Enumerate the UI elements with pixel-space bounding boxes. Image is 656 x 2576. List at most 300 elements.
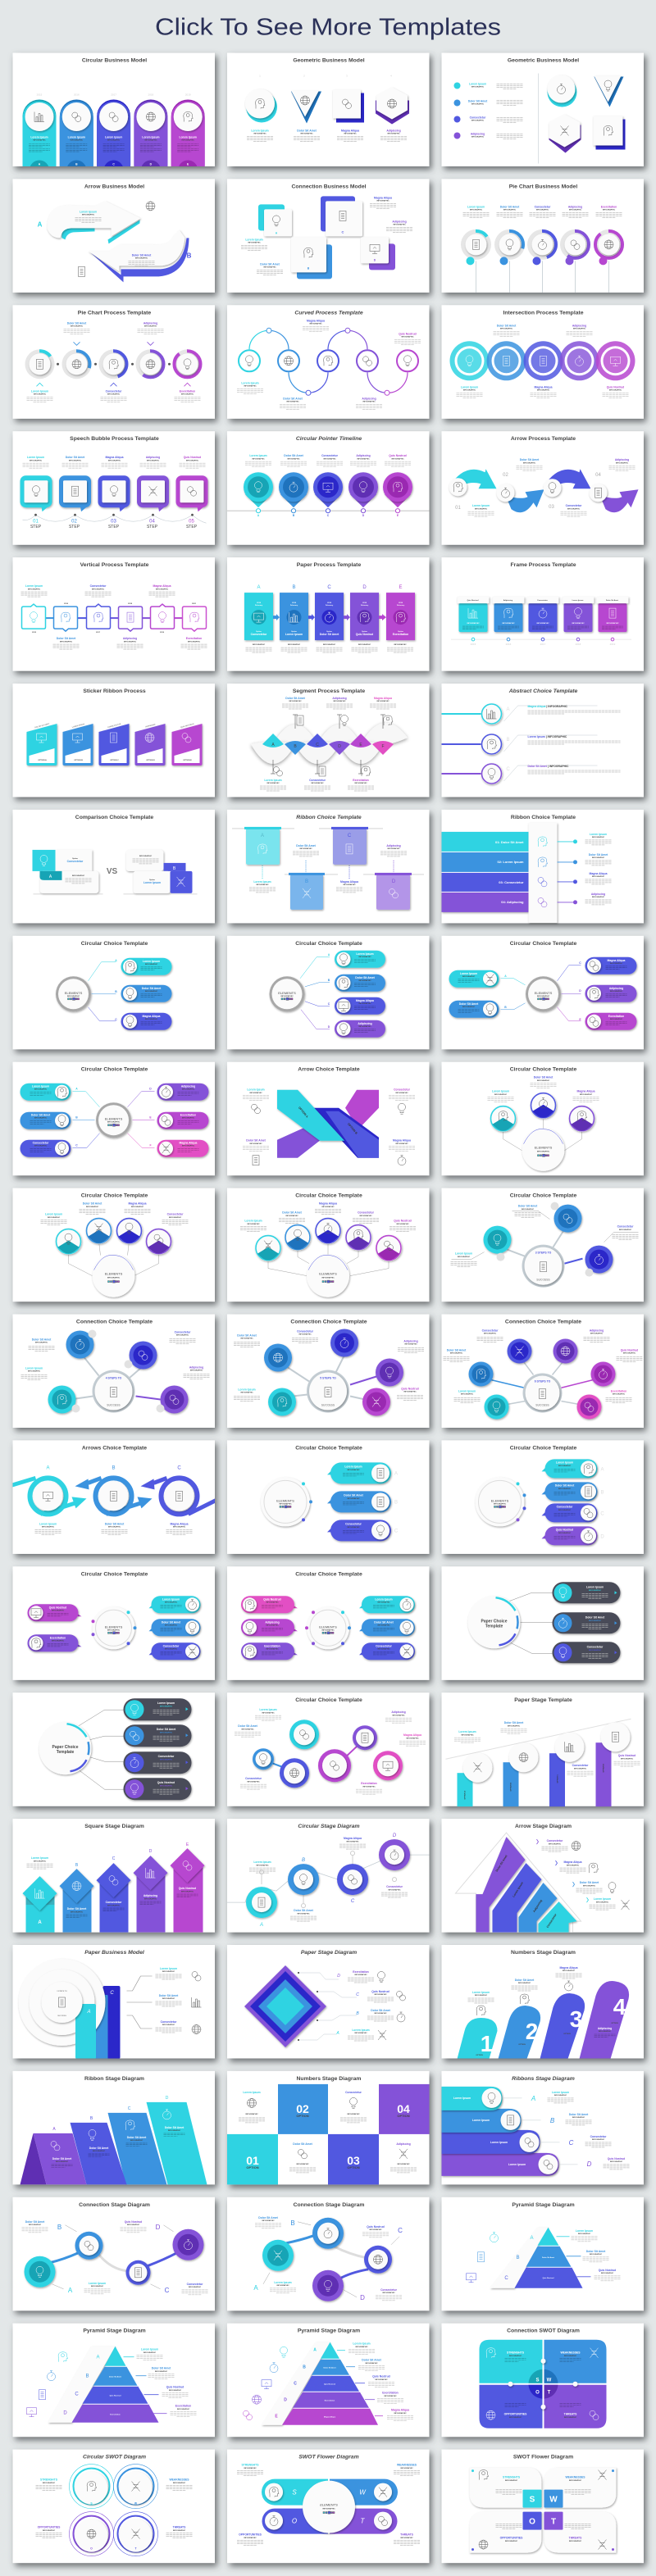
text labels: Dolor Sit Amet	[500, 205, 520, 208]
option pills: INFOGRAPHIC	[182, 1145, 195, 1147]
diagram: paper hub: Paper Choice	[481, 1619, 508, 1624]
diagram: stacked ribbons: Lorem Ipsum	[472, 2119, 490, 2122]
text labels: Consectetur	[297, 1329, 314, 1333]
diagram: five pills: D	[150, 162, 153, 166]
text labels: INFOGRAPHIC	[297, 1912, 310, 1915]
diagram: pointers on timeline: B	[293, 514, 295, 517]
diagram: concentric paper: SUCCESS	[57, 2015, 66, 2017]
diagram: linked stages	[227, 1833, 430, 1928]
heading: Circular Choice Template	[295, 1445, 362, 1451]
diagram: ribbon arrows: 04	[595, 473, 601, 478]
heading: Circular Business Model	[82, 57, 147, 64]
panel: Circular Choice Template M	[227, 1692, 430, 1806]
option bubbles: C	[600, 1511, 604, 1516]
text labels: Dolor Sit Amet	[297, 129, 317, 133]
text labels: INFOGRAPHIC	[60, 640, 73, 643]
text labels: INFOGRAPHIC	[461, 1393, 474, 1396]
option bubbles: INFOGRAPHIC	[347, 1497, 360, 1500]
text labels: INFOGRAPHIC	[35, 1342, 48, 1344]
text labels: Exercitation	[611, 1390, 626, 1393]
text labels: Lorem Ipsum	[576, 2229, 593, 2233]
option pills: INFOGRAPHIC	[610, 962, 623, 965]
diagram: two arrows: B	[187, 252, 192, 259]
text labels: Adipiscing	[391, 1711, 406, 1714]
text labels: INFOGRAPHIC	[181, 1890, 194, 1892]
diagram: stacked ribbons: D	[587, 2160, 592, 2168]
option bubbles: Consectetur	[345, 1522, 362, 1525]
diagram: bookmarks: C	[348, 834, 352, 838]
option bubbles: B	[394, 1500, 398, 1505]
diagram: hanging frames: INFOGRAPHIC	[572, 622, 585, 625]
text labels: INFOGRAPHIC	[173, 1526, 186, 1529]
text labels: INFOGRAPHIC	[144, 2351, 157, 2354]
diagram: pyramid: A	[530, 2236, 534, 2241]
diagram: paper bars: Consectetur	[251, 633, 267, 636]
text labels: INFOGRAPHIC	[563, 1969, 576, 1972]
diagram: VS comparison: INFOGRAPHIC	[72, 875, 85, 877]
panel: Pyramid Stage Diagram A	[441, 2197, 644, 2310]
text labels: Dolor Sit Amet	[284, 454, 304, 457]
text labels: Lorem Ipsum	[241, 381, 259, 384]
text labels: Adipiscing	[189, 1365, 203, 1369]
option pills: INFOGRAPHIC	[182, 1088, 195, 1091]
text labels: INFOGRAPHIC	[181, 393, 194, 395]
option bubbles: Dolor Sit Amet	[344, 1493, 364, 1497]
text labels: Consectetur	[572, 1764, 589, 1767]
text labels: INFOGRAPHIC	[359, 1215, 372, 1217]
text labels: WEAKNESSES	[397, 2464, 417, 2467]
diagram: five pills	[23, 93, 205, 166]
heading: Circular Choice Template	[81, 941, 148, 947]
text labels	[585, 833, 612, 905]
option pills: Lorem Ipsum	[460, 972, 477, 975]
text labels: Adipiscing	[362, 397, 376, 400]
option pills: INFOGRAPHIC	[145, 963, 158, 965]
text labels: Adipiscing	[332, 697, 347, 700]
text labels	[504, 2351, 581, 2419]
diagram: pointers on timeline: A	[257, 514, 260, 517]
text labels: Dolor Sit Amet	[586, 2250, 606, 2253]
text labels: INFOGRAPHIC	[135, 257, 148, 260]
connector lines	[300, 953, 330, 1029]
connector lines: A	[328, 953, 330, 956]
diagram: checkerboard of numbers: OPTION	[296, 2114, 309, 2118]
text labels: INFOGRAPHIC	[578, 2233, 591, 2235]
text labels: INFOGRAPHIC	[43, 2482, 56, 2484]
dark option pills: INFOGRAPHIC	[160, 1785, 173, 1788]
text labels: INFOGRAPHIC	[247, 1223, 260, 1225]
text labels: INFOGRAPHIC	[592, 875, 605, 878]
option pills: Exercitation	[608, 1015, 624, 1018]
diagram: checkerboard of numbers	[227, 2084, 430, 2184]
heading: Arrow Business Model	[84, 184, 144, 189]
text labels: INFOGRAPHIC	[286, 400, 299, 402]
option pills: Magna Aliqua	[608, 959, 626, 962]
text labels: Magna Aliqua	[391, 2409, 409, 2412]
text labels: Adipiscing	[396, 2142, 411, 2146]
text labels: Magna Aliqua	[374, 697, 392, 700]
option pills: Lorem Ipsum	[32, 1085, 49, 1088]
text labels: INFOGRAPHIC	[395, 1092, 408, 1094]
text labels: INFOGRAPHIC	[28, 588, 41, 590]
dark option pills: INFOGRAPHIC	[589, 1620, 602, 1622]
diagram: stepped paper bars	[446, 1719, 631, 1806]
text labels: Magna Aliqua	[307, 319, 325, 322]
option bubbles: C	[394, 1529, 399, 1533]
diagram: ring hub: INFOGRAPHIC	[321, 1629, 335, 1631]
text labels: THREATS	[400, 2533, 414, 2537]
diagram: bookmarks: B	[305, 879, 308, 884]
text labels: Lorem Ipsum	[160, 1967, 177, 1970]
text labels: INFOGRAPHIC	[333, 700, 346, 702]
heading: Circular Choice Template	[510, 1445, 576, 1451]
text labels: INFOGRAPHIC	[590, 1333, 604, 1335]
text labels: INFOGRAPHIC	[176, 1334, 189, 1337]
text labels: INFOGRAPHIC	[147, 459, 160, 461]
option pills: Adipiscing	[358, 1022, 372, 1025]
diagram: linked stages: D	[393, 1833, 397, 1838]
diagram: hanging frames: INFOGRAPHIC	[467, 622, 480, 625]
text labels: Dolor Sit Amet	[520, 458, 540, 461]
diagram: SWOT quadrants: O	[535, 2391, 540, 2396]
panel: Circular Choice Template H	[441, 1188, 644, 1302]
text labels: Lorem Ipsum	[45, 1213, 62, 1216]
text labels: Lorem Ipsum	[458, 1730, 476, 1733]
panel: Paper Choice Template A	[441, 1566, 644, 1680]
text labels: INFOGRAPHIC	[253, 133, 266, 135]
diagram: paper squares: B	[308, 266, 310, 270]
text labels: STRENGHTS	[40, 2478, 58, 2482]
heading: Geometric Business Model	[508, 57, 579, 64]
diagram: numbered slanted bars: OPTION	[611, 2023, 618, 2024]
text labels: Lorem Ipsum	[247, 1088, 265, 1092]
diagram: chain of rings	[25, 2224, 203, 2294]
text labels	[451, 1205, 638, 1267]
panel: Circular Choice Template J	[441, 1440, 644, 1554]
text labels: INFOGRAPHIC	[472, 85, 485, 89]
text labels: INFOGRAPHIC	[406, 1737, 419, 1739]
diagram: four petals: O	[529, 2518, 535, 2527]
option bubbles: INFOGRAPHIC	[377, 1601, 390, 1603]
text labels: Adipiscing	[590, 1329, 604, 1333]
text labels: INFOGRAPHIC	[127, 2224, 140, 2226]
diagram: hub with four circles: ELEMENTS	[105, 1272, 123, 1276]
panel: Geometric Business Model 2	[441, 52, 644, 166]
text labels: INFOGRAPHIC	[131, 1206, 144, 1208]
text labels: Lorem Ipsum	[590, 833, 607, 836]
diagram: chain of rings: C	[398, 2227, 403, 2234]
text labels: Dolor Sit Amet	[32, 1338, 52, 1341]
diagram: pyramid: B	[85, 2374, 89, 2379]
heading: Square Stage Diagram	[84, 1824, 144, 1829]
panel: Circular SWOT Diagram	[13, 2450, 215, 2563]
diagram: bookmarks	[232, 827, 424, 910]
panel: Connection Choice Template A	[13, 1315, 215, 1428]
text labels: Exercitation	[361, 1782, 377, 1785]
diagram: SWOT quadrants: W	[547, 2378, 552, 2383]
panel: Paper Choice Template B	[13, 1692, 215, 1806]
text labels: INFOGRAPHIC	[401, 335, 414, 338]
diagram: connected hub: SUCCESS	[536, 1279, 550, 1282]
diagram: pyramid: Dolor Sit Amet	[323, 2367, 336, 2369]
option pills: INFOGRAPHIC	[145, 990, 158, 993]
panel: Arrow Process Template	[441, 431, 644, 545]
text labels	[245, 454, 411, 466]
text labels: Dolor Sit Amet	[296, 844, 317, 847]
diagram: pyramid: D	[284, 2398, 287, 2403]
diagram: five pills: E	[187, 162, 189, 166]
diagram: pyramid: Dolor Sit Amet	[542, 2256, 554, 2259]
diagram: pills with center circle	[262, 2479, 398, 2534]
text labels: Adipiscing	[591, 893, 605, 896]
diagram: bookmarks: D	[392, 879, 396, 884]
option bubbles: INFOGRAPHIC	[377, 1647, 390, 1650]
text labels: Dolor Sit Amet	[152, 2367, 171, 2370]
diagram: hub: INFOGRAPHIC	[107, 1121, 121, 1124]
diagram: pie rings	[461, 229, 624, 293]
text labels	[247, 129, 407, 141]
text labels: INFOGRAPHIC	[569, 2540, 582, 2542]
diagram: hub with four nodes	[48, 1329, 189, 1413]
option bubbles: Lorem Ipsum	[162, 1597, 180, 1601]
text labels: INFOGRAPHIC	[374, 1993, 387, 1996]
diagram: pyramid: Dolor Sit Amet	[109, 2376, 121, 2378]
heading: Arrows Choice Template	[82, 1445, 147, 1451]
text labels: INFOGRAPHIC	[321, 1206, 335, 1208]
text labels: Exercitation	[382, 2392, 399, 2395]
diagram: pyramid: C	[294, 2382, 297, 2387]
option pills: Magna Aliqua	[356, 999, 374, 1002]
diagram: hanging frames: 2015	[471, 643, 476, 646]
panel: Circular Choice Template K	[13, 1566, 215, 1680]
text labels: Lorem Ipsum	[251, 129, 269, 133]
heading: Paper Business Model	[84, 1950, 144, 1956]
diagram: ring hub	[476, 1477, 526, 1526]
text labels: INFOGRAPHIC	[567, 1864, 580, 1866]
heading: Pyramid Stage Diagram	[83, 2328, 146, 2334]
option bubbles: INFOGRAPHIC	[52, 1609, 65, 1611]
diagram: hub with five nodes: 5 STEPS TO	[320, 1377, 336, 1380]
text labels: Consectetur	[90, 584, 107, 588]
text labels	[34, 1522, 192, 1534]
text labels: Dolor Sit Amet	[89, 2147, 109, 2150]
text labels: INFOGRAPHIC	[296, 2163, 309, 2165]
text labels: Consectetur	[345, 2091, 362, 2094]
diagram: five pills: 2018	[148, 93, 154, 97]
text labels: INFOGRAPHIC	[536, 209, 549, 211]
diagram: hanging frames: INFOGRAPHIC	[502, 622, 515, 625]
text labels: INFOGRAPHIC	[108, 459, 121, 461]
text labels	[571, 2229, 620, 2281]
diagram: hub: ELEMENTS	[278, 991, 296, 995]
diagram: stacked arrows: Lorem Ipsum	[512, 1881, 524, 1898]
text labels: STRENGHTS	[507, 2351, 525, 2355]
text labels	[536, 1839, 630, 1910]
diagram: linked stages: B	[302, 1858, 305, 1863]
text labels: Lorem Ipsum	[80, 210, 97, 213]
dark option pills: Quis Nostrud	[157, 1781, 175, 1784]
connector lines: B	[504, 1006, 507, 1009]
option pills: Adipiscing	[181, 1085, 195, 1088]
diagram: five pills: B	[75, 162, 78, 166]
panel: Circular Choice Template G	[227, 1188, 430, 1302]
panel: Intersection Process Template	[441, 305, 644, 419]
text labels: INFOGRAPHIC	[619, 1229, 632, 1231]
text labels: Adipiscing	[386, 844, 401, 847]
diagram: arrows with diamonds: E	[186, 1842, 189, 1847]
connector lines: D	[579, 989, 581, 993]
panel: Arrow Business Model	[13, 179, 215, 293]
diagram: four shapes: 4	[390, 74, 392, 77]
diagram: paper bars: Option	[326, 630, 333, 633]
diagram: stepped paper bars: OPTION D	[604, 1763, 605, 1772]
diagram: pyramid: B	[516, 2256, 520, 2260]
heading: Intersection Process Template	[503, 310, 584, 316]
panel: Connection SWOT Diagram	[441, 2324, 644, 2437]
panel: Arrow Stage Diagram	[441, 1819, 644, 1933]
diagram: checkerboard of numbers: 01	[246, 2154, 259, 2167]
diagram: pills with center circle: T	[361, 2518, 366, 2525]
text labels: Lorem Ipsum	[249, 454, 267, 457]
text labels: INFOGRAPHIC	[262, 2219, 275, 2222]
text labels: Consectetur	[566, 504, 582, 507]
text labels: INFOGRAPHIC	[592, 2138, 605, 2141]
text labels: WEAKNESSES	[565, 2476, 585, 2479]
text labels: Lorem Ipsum	[25, 584, 43, 588]
diagram: bookmarks: A	[261, 834, 264, 838]
diagram: pyramid: Exercitation	[325, 2400, 335, 2402]
option pills: INFOGRAPHIC	[358, 1025, 371, 1028]
diagram: paper bars: E	[399, 585, 403, 590]
text labels: Quis Nostrud	[184, 456, 201, 459]
diagram: chain of rings: D	[156, 2224, 161, 2231]
diagram: slanted stickers: LOREM IPSUM	[72, 724, 84, 729]
diagram: hub: ELEMENTS	[65, 991, 83, 995]
text labels: Dolor Sit Amet	[105, 1522, 125, 1525]
text labels: INFOGRAPHIC	[472, 103, 485, 105]
diagram: five pills: Lorem Ipsum	[30, 136, 48, 139]
text labels	[26, 1856, 198, 1918]
diagram: frames	[21, 603, 207, 634]
diagram: paper bars: C	[327, 585, 331, 590]
text labels: Quis Nostrud	[371, 1990, 390, 1993]
text labels: Magna Aliqua	[577, 1090, 595, 1093]
text labels: Exercitation	[180, 389, 195, 393]
text labels: Consectetur	[394, 1088, 411, 1092]
diagram: paper hub: Template	[57, 1750, 75, 1755]
diagram: five pills: A	[39, 162, 41, 166]
heading: Circular Choice Template	[510, 1193, 576, 1199]
diagram: slanted stickers: OPTION B	[74, 760, 83, 761]
text labels: INFOGRAPHIC	[596, 1901, 609, 1903]
diagram: paper squares: A	[276, 231, 278, 234]
text labels: WEAKNESSES	[169, 2478, 189, 2482]
diagram: hub with six nodes: SUCCESS	[535, 1403, 549, 1406]
text labels: INFOGRAPHIC	[601, 2272, 614, 2274]
heading: Comparison Choice Template	[75, 815, 153, 820]
diagram: four petals: T	[551, 2518, 556, 2527]
text labels: INFOGRAPHIC	[388, 1888, 401, 1891]
text labels: INFOGRAPHIC	[537, 1079, 550, 1082]
dark option pills: Consectetur	[587, 1645, 604, 1648]
text labels: INFOGRAPHIC	[244, 2467, 257, 2469]
diagram: stacked arrows: Adipiscing	[532, 1899, 543, 1913]
diagram: pointers on timeline: C	[327, 514, 330, 517]
text labels: Adipiscing	[392, 220, 407, 223]
diagram: chain of rings: A	[253, 2284, 258, 2292]
text labels: Adipiscing	[615, 458, 629, 461]
text labels: INFOGRAPHIC	[347, 2113, 360, 2115]
text labels	[23, 456, 205, 468]
panel: Paper Process Template	[227, 557, 430, 671]
text labels	[41, 1202, 189, 1225]
text labels	[548, 2091, 630, 2169]
text labels	[503, 705, 620, 781]
text labels: Magna Aliqua	[393, 1139, 411, 1143]
connector lines: D	[328, 1025, 330, 1029]
diagram: paper bars: 2018	[399, 602, 403, 604]
diagram: pyramid	[466, 2228, 590, 2288]
panel: Circular Choice Template F	[13, 1188, 215, 1302]
text labels: INFOGRAPHIC	[458, 1256, 471, 1258]
panel: Circular Choice Template B	[227, 936, 430, 1049]
diagram: slanted stickers: OPTION C	[110, 760, 119, 761]
text labels: Magna Aliqua	[340, 880, 358, 884]
text labels: INFOGRAPHIC	[288, 643, 301, 646]
diagram: ribbon arrows: 02	[503, 473, 508, 478]
text labels: INFOGRAPHIC	[298, 1333, 312, 1336]
option bubbles: B	[600, 1490, 604, 1495]
diagram: hub with five nodes: SUCCESS	[321, 1403, 335, 1406]
option pills: INFOGRAPHIC	[610, 1018, 623, 1020]
text labels: Magna Aliqua	[535, 385, 553, 388]
text labels: INFOGRAPHIC	[400, 2537, 413, 2539]
diagram: concentric paper: 3 STEPS TO	[57, 1991, 67, 1992]
option bubbles: Consectetur	[163, 1644, 180, 1647]
text labels: INFOGRAPHIC	[505, 2479, 518, 2482]
text labels	[136, 2348, 197, 2417]
text labels: INFOGRAPHIC	[376, 700, 390, 702]
text labels: Adipiscing	[403, 1339, 418, 1343]
diagram: speech bubbles: STEP	[30, 525, 42, 529]
diagram: ring hub: ELEMENTS	[105, 1624, 123, 1629]
diagram: paper hub: Template	[485, 1624, 503, 1629]
heading: Connection Choice Template	[76, 1320, 153, 1324]
text labels: INFOGRAPHIC	[362, 1785, 376, 1788]
text labels: Magna Aliqua	[403, 1733, 421, 1737]
diagram: hub	[96, 1102, 131, 1138]
text labels: Dolor Sit Amet	[127, 2136, 147, 2139]
panel: Connection Business Model	[227, 179, 430, 293]
text labels: Dolor Sit Amet	[132, 253, 152, 257]
text labels: INFOGRAPHIC	[567, 507, 581, 510]
text labels: INFOGRAPHIC	[403, 1391, 417, 1393]
diagram: four shapes: 1	[259, 74, 261, 77]
diagram: crossing arrows: OPTION A	[298, 1106, 309, 1119]
heading: Circular Choice Template	[295, 941, 362, 947]
diagram: hub	[56, 976, 91, 1011]
option bubbles: Lorem Ipsum	[375, 1597, 393, 1601]
diagram: hanging frames: 2019	[610, 643, 616, 646]
text labels: Consectetur	[245, 1777, 262, 1780]
diagram: shapes	[538, 74, 625, 164]
text labels: INFOGRAPHIC	[256, 884, 269, 886]
text labels: Magna Aliqua	[106, 456, 124, 459]
diagram: five pills: C	[112, 162, 115, 166]
text labels: INFOGRAPHIC	[252, 457, 265, 460]
text labels: Dolor Sit Amet	[165, 2126, 184, 2129]
option bubbles: Exercitation	[264, 1644, 280, 1647]
